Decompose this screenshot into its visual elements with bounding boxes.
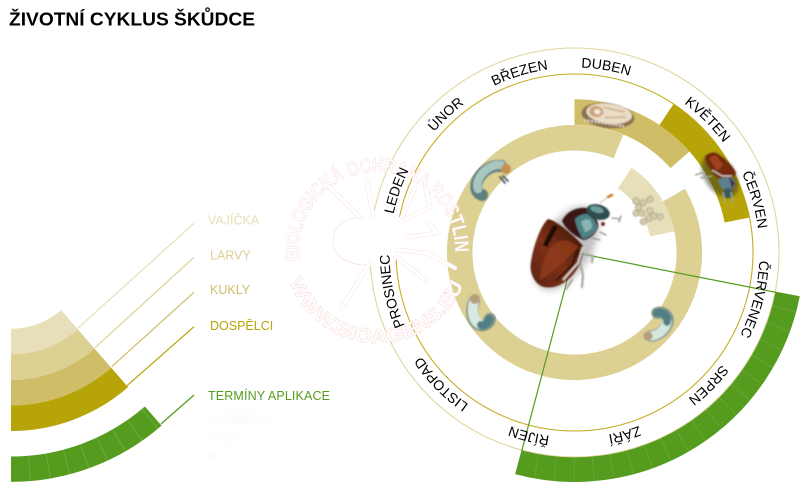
legend labels: KUKLY	[210, 283, 251, 297]
legend arc: application dates	[11, 416, 153, 469]
lifecycle ring: adults	[666, 115, 737, 220]
watermark text: organisation: BIOLOGICKÁ OCHRANA ROSTLIN	[285, 158, 470, 262]
legend labels: TERMÍNY APLIKACE	[208, 388, 330, 403]
icon: larva on upper left of ring	[476, 164, 511, 195]
beetle legs and antenna	[566, 195, 621, 289]
month: rijen: ŘÍJEN	[508, 426, 548, 448]
legend	[11, 212, 330, 469]
beetle wing cases	[531, 219, 583, 287]
icon: eggs	[633, 196, 663, 225]
month: zari: ZÁŘÍ	[609, 426, 642, 446]
beetle shadow	[520, 195, 612, 301]
beetle thorax	[562, 208, 598, 240]
faint ghost marks under legend	[210, 417, 270, 461]
month labels	[380, 58, 772, 448]
watermark spider body	[333, 217, 425, 265]
adult beetle body	[695, 153, 736, 203]
month ring outlines	[370, 48, 779, 457]
legend leader lines	[78, 223, 194, 424]
month: duben: DUBEN	[582, 58, 631, 76]
legend labels: VAJÍČKA	[208, 212, 260, 228]
month: unor: ÚNOR	[428, 98, 464, 130]
month: brezen: BŘEZEN	[491, 60, 548, 86]
lifecycle ring: larvae	[460, 138, 689, 367]
legend labels: DOSPĚLCI	[210, 318, 273, 333]
watermark spider outline and legs	[327, 182, 455, 307]
month: kveten: KVĚTEN	[685, 96, 730, 142]
application window arc	[518, 294, 788, 470]
icon: adult beetle on ring	[694, 148, 746, 204]
month: prosinec: PROSINEC	[380, 255, 404, 328]
legend labels: LARVY	[210, 248, 251, 262]
adult beetle shadow	[694, 148, 746, 204]
legend labels	[208, 212, 330, 403]
application window radial lines	[522, 252, 776, 451]
lifecycle ring: eggs	[625, 178, 662, 234]
legend fan: stage colours	[11, 320, 120, 418]
icon: pupa	[580, 100, 636, 131]
month: cerven: ČERVEN	[743, 171, 768, 228]
month: srpen: SRPEN	[688, 366, 728, 406]
icon: central beetle	[520, 195, 621, 301]
lifecycle ring: pupae	[574, 112, 680, 160]
beetle head	[584, 202, 612, 226]
watermark text: web address: WWW.BIOAGENS.EU	[290, 276, 462, 344]
icon: larva on lower left of ring	[470, 294, 490, 325]
title: ŽIVOTNÍ CYKLUS ŠKŮDCE	[9, 8, 255, 30]
watermark: spider and circular text	[285, 158, 470, 344]
month: leden: LEDEN	[384, 167, 408, 214]
month: cervenec: ČERVENEC	[742, 262, 772, 338]
month: listopad: LISTOPAD	[416, 358, 468, 412]
icon: larva on lower right of ring	[643, 312, 668, 341]
